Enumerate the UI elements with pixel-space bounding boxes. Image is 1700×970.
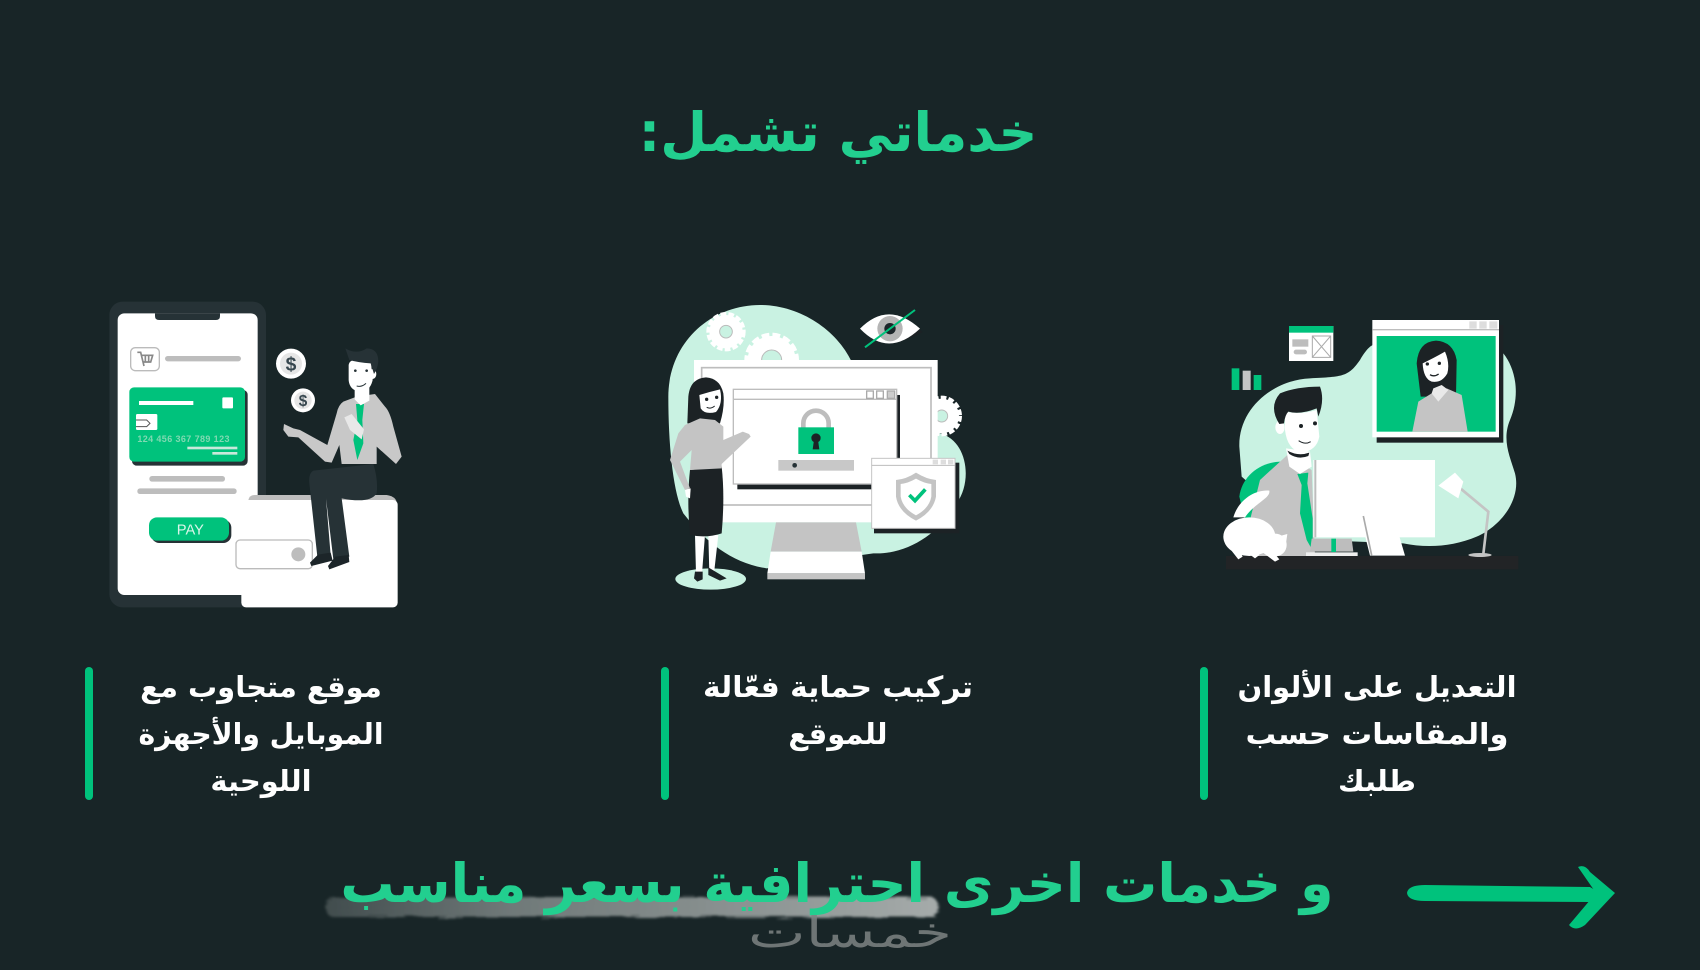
desk	[1226, 556, 1518, 569]
man with monitor	[1239, 387, 1435, 556]
service 2 text: تركيب حماية فعّالة	[703, 670, 973, 704]
panel: security service illustration	[668, 305, 966, 590]
eye	[860, 310, 923, 347]
service 1 text: الموبايل والأجهزة	[138, 716, 384, 751]
service 2 accent bar	[661, 667, 669, 800]
panel: design customization illustration	[1223, 320, 1518, 569]
service 1 text	[138, 670, 384, 798]
arrow	[1407, 866, 1615, 928]
title: خدماتي تشمل:	[639, 101, 1037, 164]
lock window	[733, 389, 900, 489]
service 3 text: طلبك	[1338, 764, 1416, 798]
mint blob	[1239, 345, 1516, 546]
wallet	[236, 495, 398, 607]
service 3 text	[1237, 669, 1517, 798]
mint blob	[668, 305, 966, 568]
service 1 text: اللوحية	[210, 764, 312, 798]
panel: mobile service illustration	[109, 302, 402, 607]
video call window	[1372, 320, 1503, 443]
bar icons	[1232, 368, 1261, 390]
cat	[1223, 491, 1287, 562]
shield window	[872, 458, 959, 533]
coins: $	[299, 393, 308, 410]
service 3 text: التعديل على الألوان	[1237, 669, 1517, 704]
brush stroke highlight	[326, 897, 938, 917]
service 3 accent bar	[1200, 667, 1208, 800]
watermark: خمسات	[748, 908, 952, 957]
gears	[709, 315, 959, 433]
service 3 text: والمقاسات حسب	[1246, 717, 1508, 751]
service 1 accent bar	[85, 667, 93, 800]
phone	[109, 302, 266, 607]
small layout window	[1289, 326, 1333, 361]
desk lamp	[1438, 473, 1492, 557]
woman	[670, 377, 758, 590]
service 2 text: للموقع	[788, 717, 888, 751]
phone: PAY	[177, 523, 204, 539]
monitor	[694, 360, 938, 579]
service 2 text	[703, 670, 973, 751]
service 1 text: موقع متجاوب مع	[140, 670, 382, 704]
coins	[276, 349, 315, 412]
man	[283, 348, 402, 569]
coins: $	[286, 355, 297, 376]
closing line: و خدمات اخرى احترافية بسعر مناسب	[340, 852, 1334, 915]
phone: 124 456 367 789 123	[137, 434, 230, 444]
